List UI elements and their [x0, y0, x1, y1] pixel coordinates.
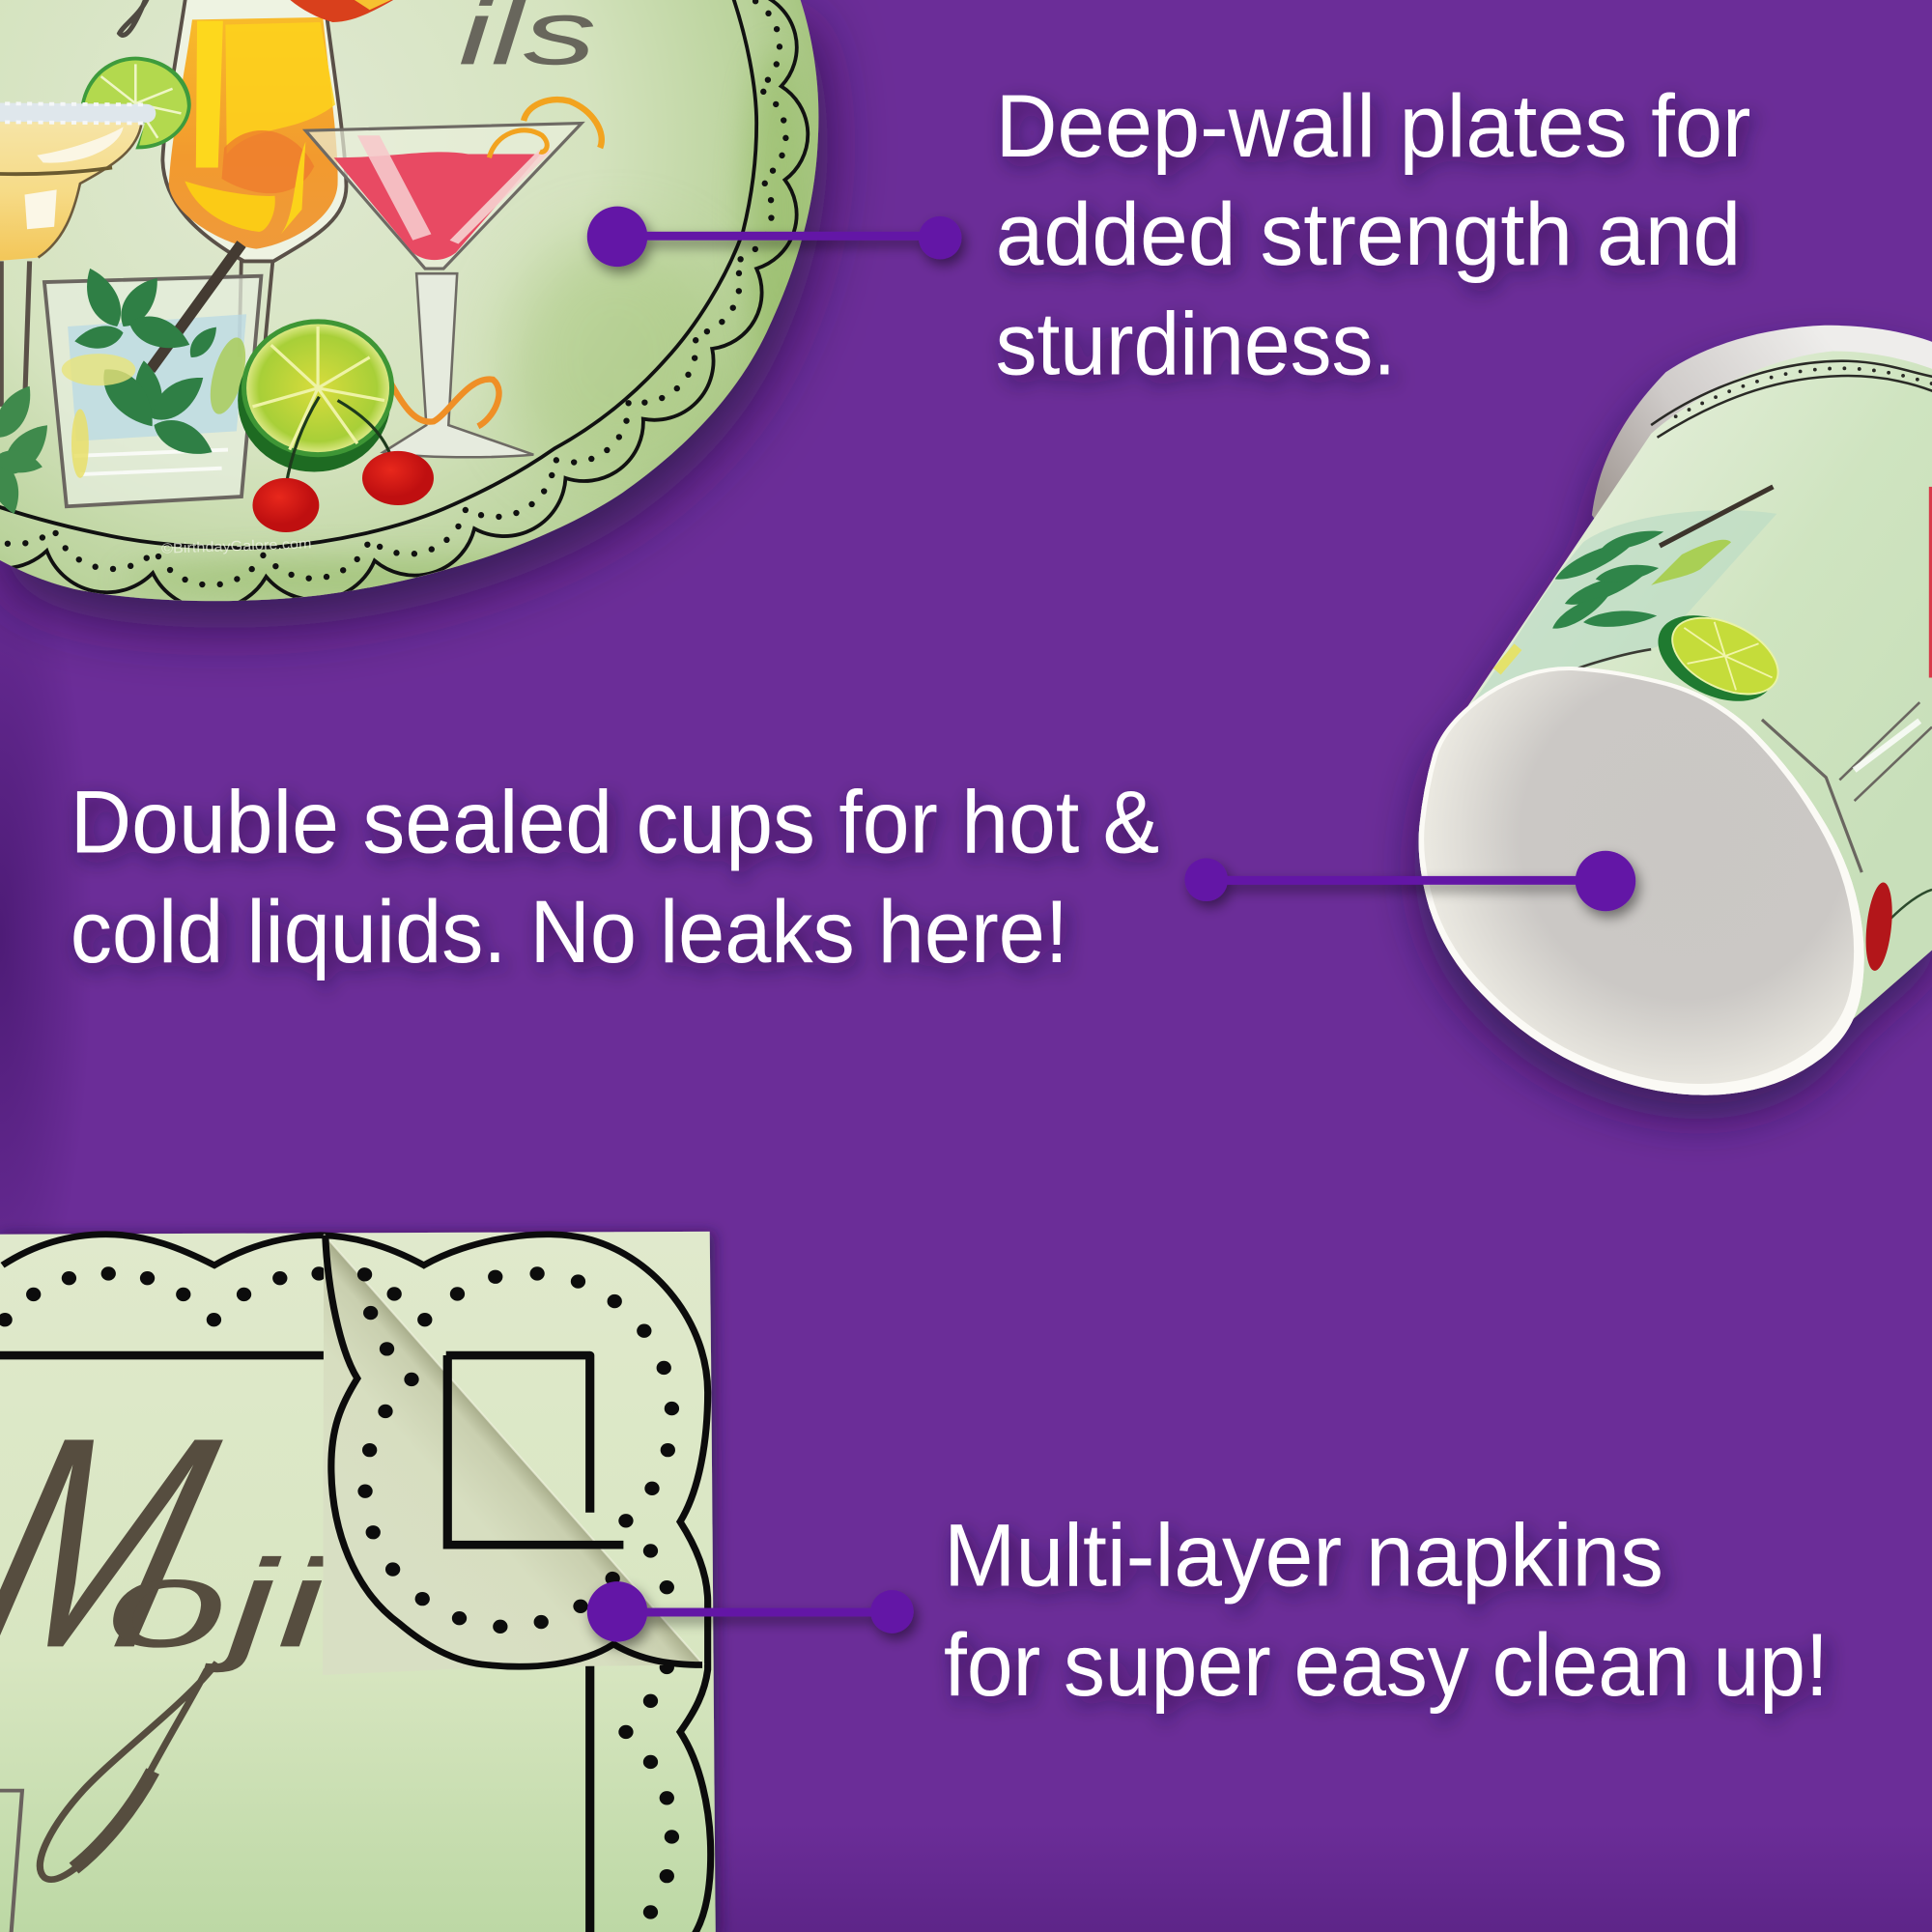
martini glass — [305, 99, 602, 457]
printed cherry on cup — [1862, 881, 1896, 972]
napkin dots — [0, 1266, 679, 1919]
orange cocktail glass — [162, 0, 346, 357]
cup body and rim — [1419, 326, 1932, 1095]
callout text: cups: cold liquids. No leaks here! — [71, 883, 1068, 981]
callout text: napkins — [944, 1507, 1829, 1715]
glass outline at napkin bottom — [0, 1791, 22, 1932]
cup base — [1419, 667, 1864, 1095]
napkin product photo — [0, 1232, 716, 1932]
plate body with shadow — [0, 0, 818, 601]
folded napkin corner — [323, 1235, 704, 1675]
napkin scalloped edge — [3, 1235, 711, 1932]
callout connector: plates — [587, 207, 962, 267]
lime slice on margarita — [80, 57, 191, 149]
plate scalloped border — [0, 0, 808, 609]
callout text: plates: Deep-wall plates for — [996, 77, 1750, 176]
watermark: ©BirthdayGalore.com — [161, 536, 312, 557]
printed lime on cup — [1644, 597, 1790, 720]
callout text: plates: sturdiness. — [996, 296, 1396, 394]
lime half — [238, 322, 392, 472]
callout text: napkins: Multi-layer napkins — [944, 1507, 1663, 1605]
callout text: cups — [71, 774, 1159, 981]
callout text: napkins: for super easy clean up! — [944, 1616, 1829, 1715]
cherries — [252, 397, 434, 532]
napkin border lines — [0, 1355, 590, 1932]
plate product photo — [0, 0, 818, 609]
napkin sheet — [0, 1232, 716, 1932]
mojito glass — [44, 244, 261, 506]
callout text: plates — [996, 77, 1750, 394]
salt rim — [0, 103, 147, 124]
printed martini on cup — [1762, 487, 1932, 920]
margarita glass — [0, 57, 191, 407]
garnish on orange glass — [290, 0, 393, 22]
napkin script lettering: oji — [106, 1534, 330, 1673]
callout text: plates: added strength and — [996, 185, 1741, 284]
printed mojito on cup — [1471, 487, 1776, 705]
callout connector: napkins — [587, 1581, 914, 1642]
plate artwork — [0, 0, 809, 609]
plate inner ring — [0, 0, 756, 548]
callout text: cups: Double sealed cups for hot & — [71, 774, 1159, 872]
napkin script lettering — [0, 1376, 330, 1880]
plate dotted border — [0, 0, 785, 585]
mint leaves at plate edge — [0, 386, 47, 514]
callout connector: cups — [1184, 851, 1635, 911]
cup scalloped print — [1651, 361, 1932, 438]
cup product photo — [1419, 326, 1932, 1095]
